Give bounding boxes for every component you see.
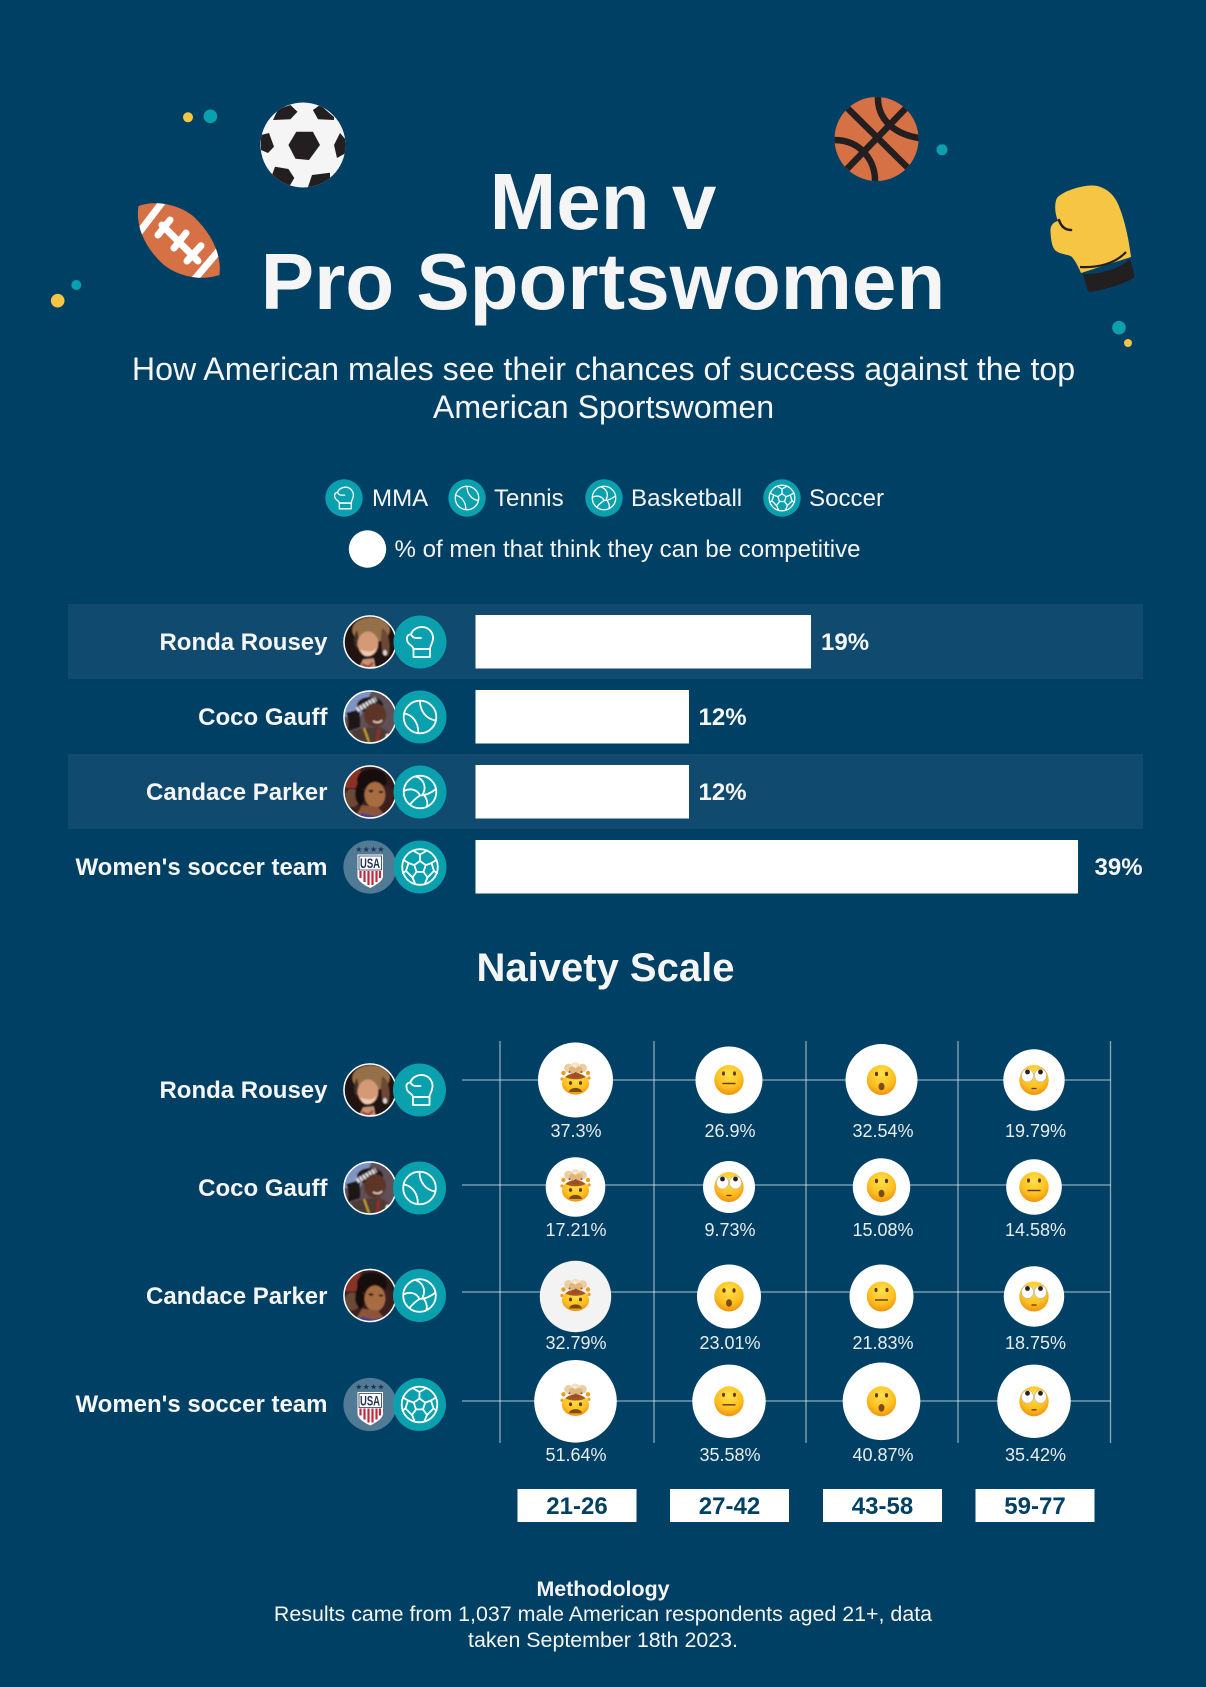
bar row: Ronda Rousey [159, 615, 869, 669]
bubbles row: Coco Gauff: 9.73% [704, 1220, 756, 1240]
bar row: Candace Parker: Candace Parker [146, 779, 328, 806]
heading: Naivety Scale: Naivety Scale [477, 946, 734, 990]
methodology: taken September 18th 2023. [468, 1628, 738, 1652]
bubbles row: Coco Gauff [545, 1157, 1066, 1240]
row label: Ronda Rousey [159, 1063, 446, 1117]
legend: Soccer: Soccer [809, 485, 884, 512]
legend: MMA [325, 479, 429, 517]
bubbles row: Candace Parker: 23.01% [699, 1333, 761, 1353]
legend: Tennis [448, 479, 564, 517]
bubbles row: Women's soccer team: 40.87% [852, 1445, 914, 1465]
age: 43-58: 43-58 [852, 1493, 913, 1520]
row label: Women's soccer team: Women's soccer team [75, 1391, 328, 1418]
legend: percent of men [349, 530, 861, 568]
legend: Tennis: Tennis [494, 485, 564, 512]
bar chart: percent of men that think they can be competitive [68, 604, 1143, 894]
row label: Coco Gauff [198, 1161, 446, 1215]
row label: Candace Parker [146, 1268, 446, 1322]
decorative dots right [1112, 321, 1132, 347]
legend: MMA: MMA [372, 485, 429, 512]
bubbles row: Women's soccer team: 51.64% [545, 1445, 607, 1465]
bubbles row: Coco Gauff: 15.08% [852, 1220, 914, 1240]
title [261, 157, 945, 326]
header illustrations [51, 96, 1134, 347]
bubbles row: Candace Parker: 18.75% [1005, 1333, 1066, 1353]
bubbles row: Women's soccer team [534, 1360, 1071, 1465]
title: Men v [490, 157, 717, 246]
subtitle: American Sportswomen [433, 389, 774, 425]
methodology: Methodology [536, 1577, 670, 1601]
age: 59-77 [976, 1489, 1094, 1522]
bar row: Coco Gauff [198, 690, 747, 744]
decorative dot right of basketball [936, 144, 948, 155]
bar row: Candace Parker: 12% [698, 779, 747, 806]
row label: Ronda Rousey: Ronda Rousey [159, 1077, 328, 1104]
subtitle [132, 351, 1075, 425]
decorative dots left [51, 280, 81, 308]
row label: Coco Gauff: Coco Gauff [198, 1175, 329, 1202]
age: 27-42 [670, 1489, 789, 1522]
legend: Basketball: Basketball [631, 485, 742, 512]
bubbles row: Women's soccer team: 35.58% [699, 1445, 761, 1465]
row bands [68, 604, 1143, 829]
bubbles row: Coco Gauff: 17.21% [545, 1220, 607, 1240]
age labels [518, 1489, 1094, 1522]
bubbles row: Ronda Rousey: 26.9% [704, 1121, 756, 1141]
bar row: Women's soccer team: 39% [1094, 854, 1143, 881]
age: 21-26 [518, 1489, 636, 1522]
bar row: Ronda Rousey: Ronda Rousey [159, 629, 328, 656]
bar row: Coco Gauff: Coco Gauff [198, 704, 329, 731]
bubbles row: Ronda Rousey: 37.3% [550, 1121, 602, 1141]
icon: boxing glove [1050, 185, 1134, 292]
title: Pro Sportswomen [261, 237, 945, 326]
bar row: Ronda Rousey: 19% [821, 629, 869, 656]
bar row: Candace Parker [146, 765, 747, 819]
bubbles row: Candace Parker [540, 1261, 1066, 1353]
bubbles row: Candace Parker: 32.79% [545, 1333, 607, 1353]
grid lines [462, 1041, 1110, 1443]
row label: Women's soccer team [75, 1378, 446, 1431]
subtitle: How American males see their chances of success against the top [132, 351, 1075, 387]
bubbles row: Women's soccer team: 35.42% [1005, 1445, 1066, 1465]
bar row: Women's soccer team: Women's soccer team [75, 854, 328, 881]
icon: basketball [834, 96, 919, 183]
legend: Basketball [585, 479, 742, 517]
icon: american football [138, 200, 221, 281]
row labels [75, 1063, 446, 1431]
legend [325, 479, 884, 568]
decorative dots top left [183, 110, 217, 123]
age: 59-77: 59-77 [1004, 1493, 1066, 1520]
bubbles row: Candace Parker: 21.83% [852, 1333, 914, 1353]
legend: Soccer [763, 479, 884, 517]
methodology [274, 1577, 932, 1652]
age: 43-58 [823, 1489, 942, 1522]
bar row: Women's soccer team [75, 840, 1143, 894]
methodology: Results came from 1,037 male American respondents aged 21+, data [274, 1602, 932, 1626]
bubbles row: Ronda Rousey [538, 1042, 1066, 1141]
bubbles row: Coco Gauff: 14.58% [1005, 1220, 1066, 1240]
bar row: Coco Gauff: 12% [698, 704, 747, 731]
legend: percent of men: % of men that think they can be competitive [394, 536, 861, 563]
age: 27-42: 27-42 [699, 1493, 760, 1520]
age: 21-26: 21-26 [546, 1493, 608, 1520]
bubble grid: naivety scale [75, 1041, 1110, 1522]
row label: Candace Parker: Candace Parker [146, 1283, 328, 1310]
bubbles row: Ronda Rousey: 19.79% [1005, 1121, 1066, 1141]
bubbles row: Ronda Rousey: 32.54% [852, 1121, 914, 1141]
icon: soccer ball [260, 102, 346, 188]
